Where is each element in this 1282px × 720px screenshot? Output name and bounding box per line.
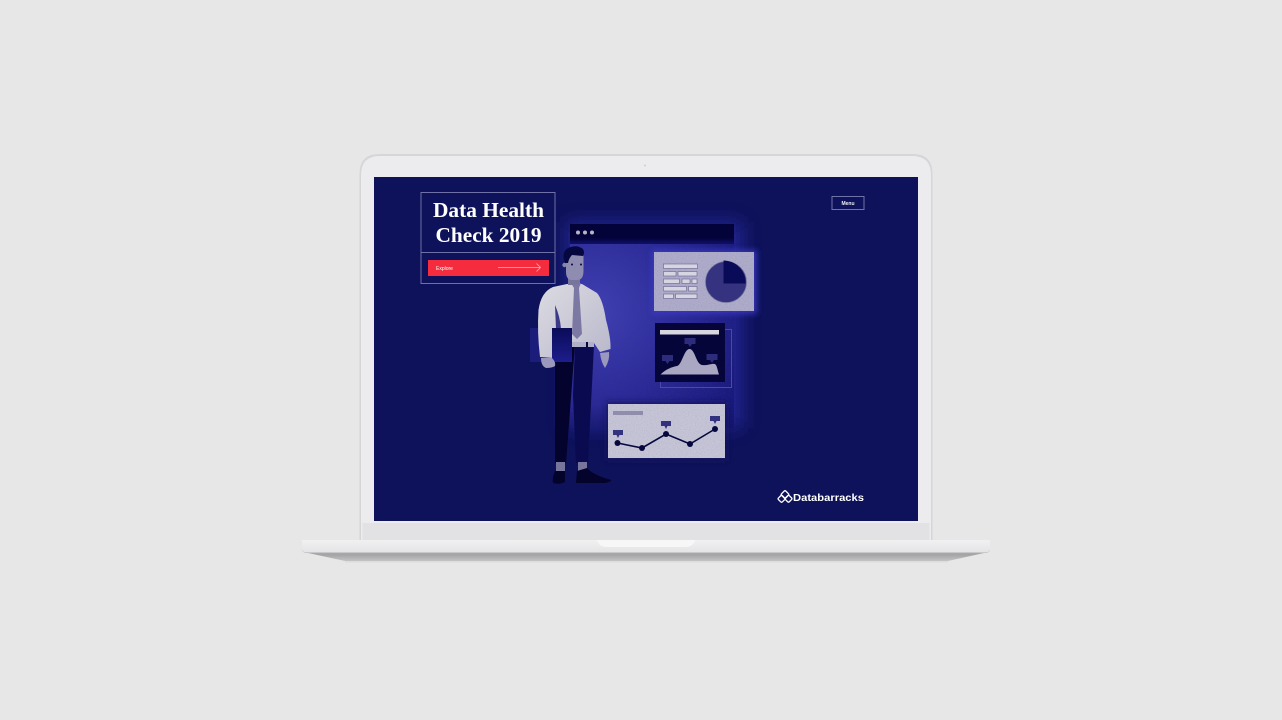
socks	[556, 462, 587, 472]
shoes	[553, 468, 611, 484]
window title bar	[570, 224, 734, 244]
title: Data Health	[433, 198, 544, 222]
panel: area chart	[655, 323, 732, 388]
pie chart	[706, 260, 746, 302]
menu button	[832, 196, 864, 210]
menu button: Menu	[841, 201, 855, 207]
line	[618, 429, 715, 448]
arm fold	[555, 305, 561, 329]
tooltips	[662, 338, 718, 364]
table bars	[664, 264, 698, 298]
laptop	[302, 154, 990, 562]
folder	[552, 328, 572, 362]
panel: pie and table	[652, 250, 757, 314]
hair	[564, 246, 584, 263]
trousers	[555, 345, 594, 463]
hands	[541, 352, 609, 368]
logo: Databarracks	[778, 490, 864, 504]
title box	[421, 192, 555, 284]
panel: line chart	[606, 402, 727, 461]
laptop base	[302, 540, 990, 562]
chart outline	[660, 330, 732, 388]
folder back	[530, 328, 551, 362]
area	[660, 349, 719, 374]
browser window illustration	[566, 222, 742, 428]
tooltips	[613, 416, 720, 438]
neck and face	[568, 278, 580, 285]
window glow	[566, 222, 742, 428]
belt	[572, 342, 594, 347]
shirt	[538, 284, 611, 358]
logo mark	[778, 490, 792, 503]
tie	[571, 283, 582, 339]
person	[530, 246, 611, 484]
laptop screen	[374, 177, 918, 521]
explore button: Explore	[436, 266, 453, 272]
logo: Databarracks: Databarracks	[793, 493, 864, 504]
laptop lid	[360, 154, 932, 540]
heading bar	[613, 411, 643, 415]
chart heading bar	[660, 330, 719, 334]
eyes	[571, 264, 582, 266]
title box: Check 2019	[436, 223, 542, 247]
points	[614, 426, 718, 451]
